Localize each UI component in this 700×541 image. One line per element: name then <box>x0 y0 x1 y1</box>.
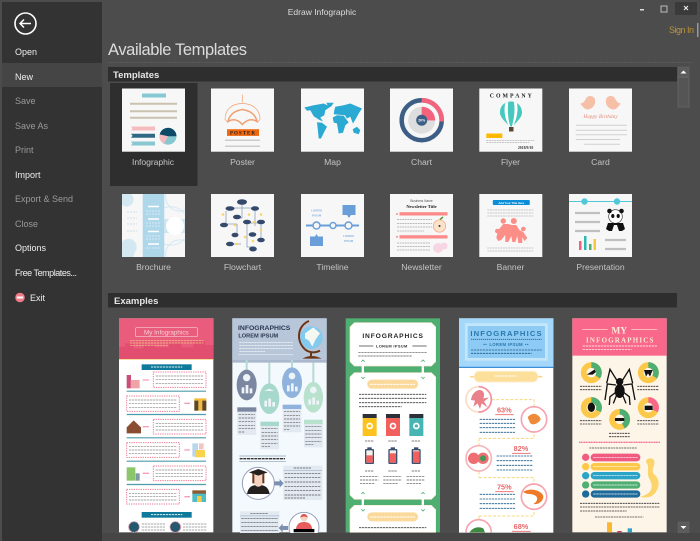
label: Chart: Chart <box>411 157 433 167</box>
example 5: My Infographics spider <box>572 318 667 532</box>
sign in link: Sign In <box>669 25 694 35</box>
template: Flowchart <box>211 194 274 257</box>
template: Chart: 20% <box>418 119 426 123</box>
example 5: My Infographics spider: MY <box>612 327 627 337</box>
template: Banner <box>479 194 542 257</box>
template: Poster: POSTER <box>230 132 256 136</box>
templates header <box>108 67 677 82</box>
template: Timeline <box>301 194 364 257</box>
title bar <box>288 2 697 17</box>
example 3: Infographics green: LOREM IPSUM <box>376 343 408 348</box>
sidebar menu: Options <box>15 243 47 253</box>
template: Infographic <box>122 88 185 152</box>
sidebar menu <box>2 2 102 541</box>
template: Brochure <box>122 194 185 257</box>
example 5: My Infographics spider: INFOGRAPHICS <box>586 336 653 344</box>
sidebar menu: New <box>15 72 34 82</box>
example 4: Infographics percentages: 68% <box>514 522 529 531</box>
sidebar menu: Open <box>15 47 37 57</box>
sidebar menu: Exit <box>30 293 46 303</box>
sidebar menu: Close <box>15 219 38 229</box>
template: Newsletter: Newsletter Title <box>406 204 437 209</box>
example 4: Infographics percentages <box>459 318 553 533</box>
template: Flyer <box>479 88 542 152</box>
selected tile <box>110 83 198 186</box>
sidebar menu: Print <box>15 145 34 155</box>
label: Card: Card <box>591 157 610 167</box>
example 2: Infographics Lorem Ipsum: LOREM IPSUM <box>238 333 279 339</box>
sidebar menu: Save As <box>15 121 49 131</box>
template: Flyer: 2018/9/10 <box>518 146 533 150</box>
example 1: My Infographics <box>119 318 213 532</box>
label: Poster: Poster <box>230 157 255 167</box>
example 3: Infographics green <box>346 318 440 532</box>
page heading: Available Templates <box>108 41 247 59</box>
examples header: Examples <box>114 296 158 307</box>
sidebar menu: Import <box>15 170 41 180</box>
example 4: Infographics percentages: INFOGRAPHICS <box>470 329 542 338</box>
template: Card: Happy Birthday <box>582 115 618 120</box>
label: Brochure: Brochure <box>136 262 171 272</box>
template: Presentation <box>569 194 632 257</box>
title bar: Edraw Infographic <box>288 7 357 17</box>
template: Chart <box>390 88 453 152</box>
label: Timeline: Timeline <box>316 262 349 272</box>
example 4: Infographics percentages: 75% <box>497 482 512 491</box>
example 4: Infographics percentages: LOREM IPSUM <box>489 342 523 347</box>
example 2: Infographics Lorem Ipsum <box>232 318 327 541</box>
scrollbar <box>678 67 689 532</box>
template: Timeline: LOREM <box>311 208 322 212</box>
bottom status strip <box>102 533 700 541</box>
example 4: Infographics percentages: 63% <box>497 405 512 414</box>
template: Newsletter <box>390 194 453 257</box>
example 2: Infographics Lorem Ipsum: INFOGRAPHICS <box>238 325 291 332</box>
template: Poster <box>211 88 274 152</box>
label: Map: Map <box>324 157 341 167</box>
template: Timeline: LOREM <box>343 234 354 238</box>
template: Timeline: IPSUM <box>344 239 354 243</box>
example 4: Infographics percentages: 82% <box>514 444 529 453</box>
template: Card <box>569 88 632 152</box>
template: Banner: Add Your Title Here <box>498 201 525 205</box>
label: Newsletter: Newsletter <box>401 262 442 272</box>
label: Flowchart: Flowchart <box>224 262 262 272</box>
icon: back arrow <box>15 13 36 34</box>
label: Flyer: Flyer <box>501 157 520 167</box>
sidebar menu: Save <box>15 96 36 106</box>
label: Banner: Banner <box>497 262 524 272</box>
icon: exit <box>15 293 25 302</box>
sidebar menu: Export & Send <box>15 194 73 204</box>
example 3: Infographics green: INFOGRAPHICS <box>362 333 424 340</box>
template: Flyer: COMPANY <box>490 94 533 100</box>
examples header <box>108 293 677 308</box>
template: Timeline: IPSUM <box>312 214 322 218</box>
label: Infographic: Infographic <box>132 157 175 167</box>
example 1: My Infographics: My Infographics <box>144 329 189 336</box>
label: Presentation: Presentation <box>576 262 625 272</box>
template: Map <box>301 88 364 152</box>
sidebar menu: Free Templates... <box>15 268 77 278</box>
template: Newsletter: Business Name <box>410 199 433 203</box>
templates header: Templates <box>113 70 159 81</box>
